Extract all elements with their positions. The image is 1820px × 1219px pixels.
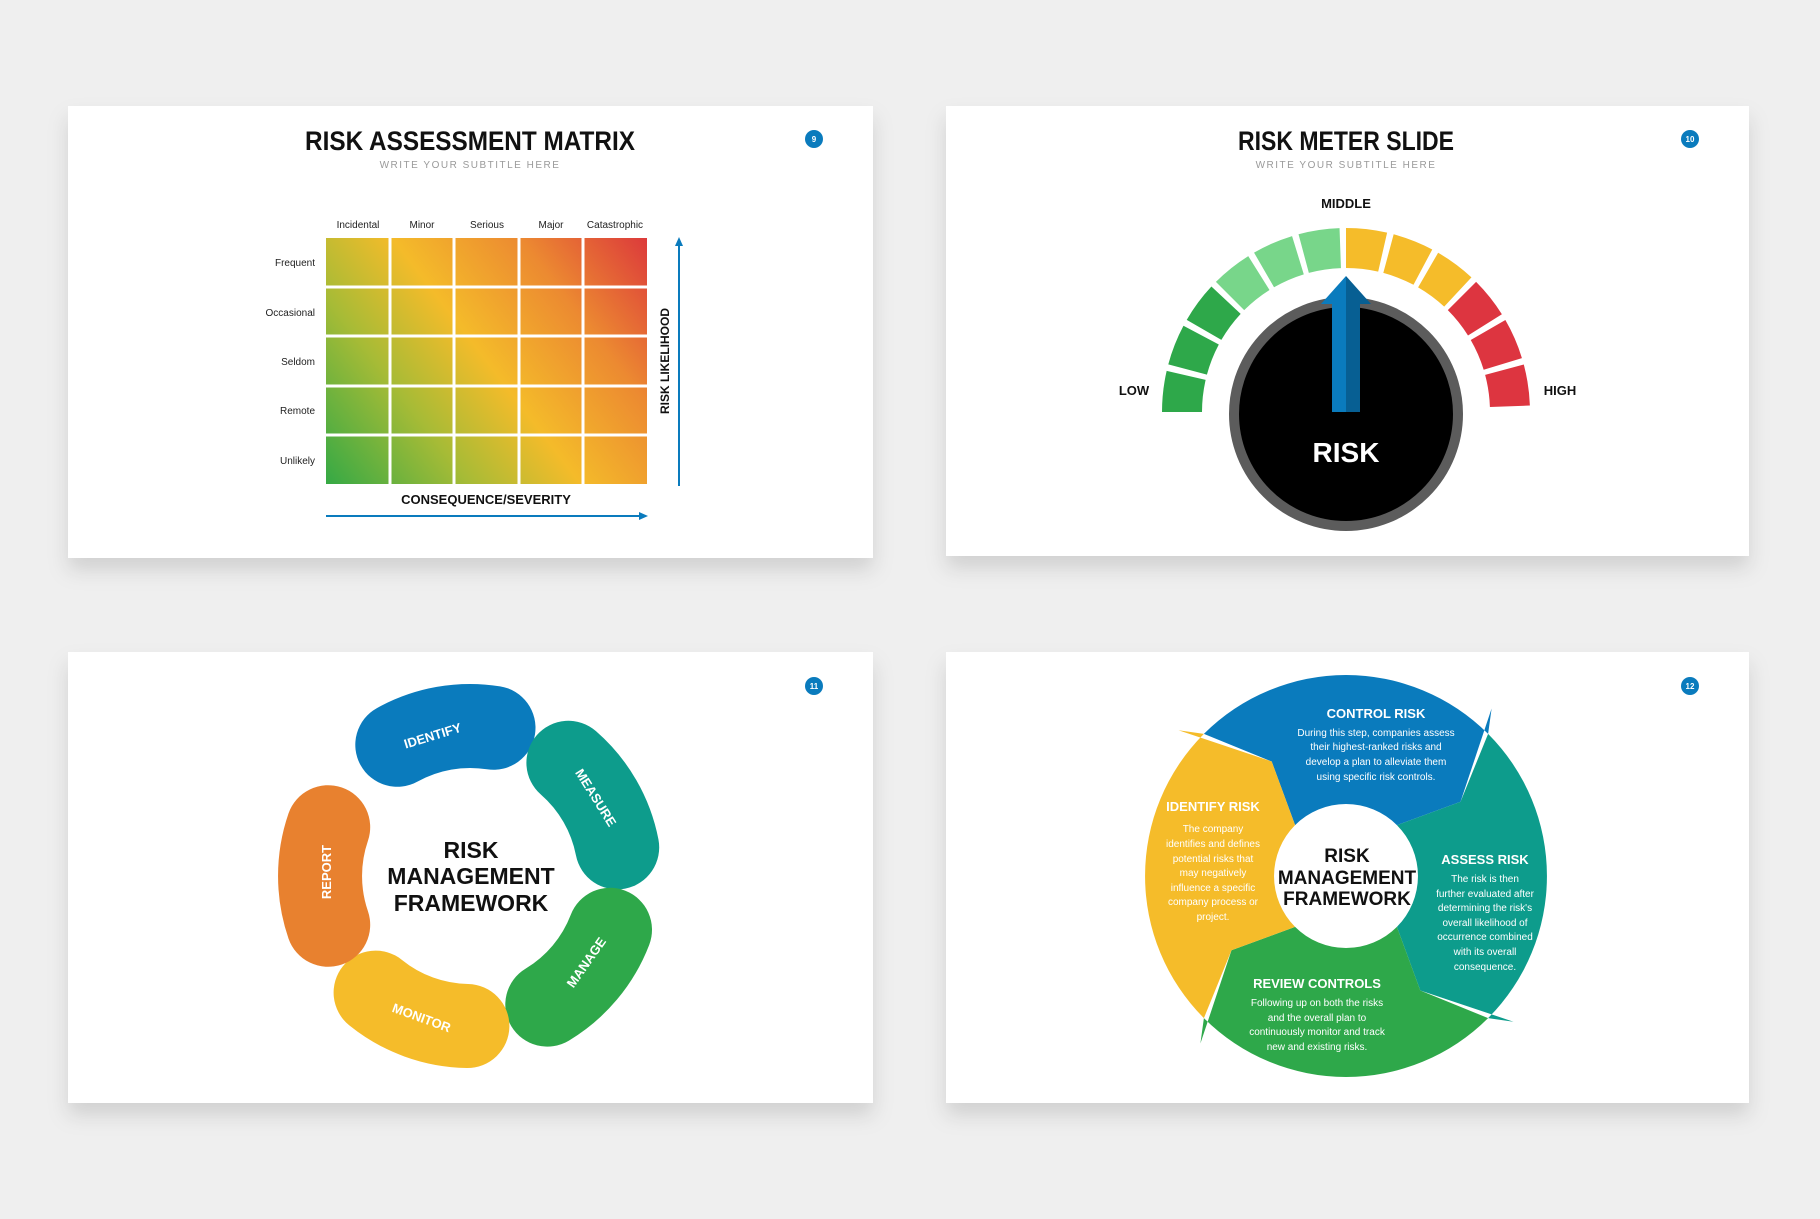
column labels: Minor	[409, 220, 435, 231]
matrix grid	[326, 238, 647, 484]
dial: RISK	[1313, 437, 1379, 468]
text: assess risk: ASSESS RISK	[1441, 852, 1529, 867]
segment labels	[319, 720, 620, 1035]
subtitle: WRITE YOUR SUBTITLE HERE	[1256, 160, 1436, 171]
meter arc segments	[1114, 180, 1578, 644]
page badge: 10	[1686, 135, 1695, 144]
center title: FRAMEWORK	[1283, 889, 1411, 910]
text: control risk: During this step, companies assess	[1297, 728, 1455, 739]
text: assess risk: with its overall	[1453, 947, 1516, 958]
title: RISK METER SLIDE	[1238, 126, 1454, 156]
center title: FRAMEWORK	[394, 890, 549, 916]
center title: RISK	[444, 837, 499, 863]
panel: risk assessment matrix	[68, 106, 873, 558]
segment labels: REPORT	[319, 845, 334, 899]
page badge	[805, 677, 823, 695]
text: review controls: Following up on both the risks	[1251, 998, 1383, 1009]
row labels: Frequent	[275, 258, 315, 269]
text: identify risk: project.	[1197, 912, 1229, 923]
text: assess risk	[1436, 852, 1535, 973]
column labels: Incidental	[337, 220, 379, 231]
labels	[1119, 196, 1576, 398]
page badge: 11	[810, 682, 819, 691]
row labels: Seldom	[281, 357, 315, 368]
arrow ring	[1145, 675, 1547, 1077]
segment labels: IDENTIFY	[402, 720, 464, 752]
row labels: Unlikely	[280, 456, 315, 467]
axis label: consequence: CONSEQUENCE/SEVERITY	[401, 492, 571, 507]
text: identify risk: potential risks that	[1173, 854, 1254, 865]
segment labels: MONITOR	[390, 1000, 453, 1035]
labels: LOW	[1119, 383, 1150, 398]
page badge	[805, 130, 823, 148]
needle arrow	[1321, 276, 1371, 412]
cycle segments	[320, 726, 617, 1026]
page badge	[1681, 130, 1699, 148]
center title	[387, 837, 555, 916]
text: identify risk: influence a specific	[1171, 883, 1255, 894]
axis label: risk likelihood: RISK LIKELIHOOD	[658, 308, 672, 414]
text: identify risk: identifies and defines	[1166, 839, 1260, 850]
text: assess risk: further evaluated after	[1436, 889, 1535, 900]
text: review controls: REVIEW CONTROLS	[1253, 976, 1381, 991]
center title: MANAGEMENT	[1278, 868, 1417, 889]
text: assess risk: The risk is then	[1451, 874, 1519, 885]
text: control risk: their highest-ranked risks and	[1310, 742, 1442, 753]
row labels	[266, 258, 315, 467]
column labels: Serious	[470, 220, 504, 231]
column labels: Major	[538, 220, 564, 231]
text: identify risk: may negatively	[1180, 868, 1246, 879]
page badge: 9	[812, 135, 817, 144]
arrow: risk likelihood	[675, 237, 683, 486]
text: control risk: develop a plan to alleviate them	[1306, 757, 1446, 768]
page badge	[1681, 677, 1699, 695]
subtitle: WRITE YOUR SUBTITLE HERE	[380, 160, 560, 171]
segment labels: MANAGE	[564, 934, 609, 990]
text: review controls: new and existing risks.	[1267, 1042, 1367, 1053]
panel: risk meter	[946, 106, 1749, 644]
text: review controls	[1249, 976, 1386, 1053]
center title: MANAGEMENT	[387, 863, 555, 889]
text: assess risk: determining the risk's	[1438, 903, 1532, 914]
center title: RISK	[1324, 846, 1370, 867]
text: identify risk: The company	[1183, 824, 1243, 835]
text: review controls: continuously monitor and track	[1249, 1027, 1386, 1038]
panel: risk management framework cycle	[68, 652, 873, 1103]
text: control risk	[1297, 706, 1455, 783]
text: assess risk: overall likelihood of	[1442, 918, 1528, 929]
page badge: 12	[1686, 682, 1695, 691]
dial	[1234, 302, 1458, 526]
column labels: Catastrophic	[587, 220, 643, 231]
text: identify risk	[1166, 799, 1260, 923]
row labels: Occasional	[266, 308, 315, 319]
text: assess risk: consequence.	[1454, 962, 1516, 973]
text: identify risk: company process or	[1168, 897, 1259, 908]
labels: HIGH	[1544, 383, 1576, 398]
segment labels: MEASURE	[572, 766, 620, 829]
panel: risk management framework arrows	[946, 652, 1749, 1103]
center title	[1278, 846, 1417, 910]
labels: MIDDLE	[1321, 196, 1371, 211]
text: control risk: using specific risk controls.	[1317, 772, 1435, 783]
text: assess risk: occurrence combined	[1437, 932, 1533, 943]
text: identify risk: IDENTIFY RISK	[1166, 799, 1260, 814]
row labels: Remote	[280, 406, 315, 417]
title: RISK ASSESSMENT MATRIX	[305, 126, 635, 156]
text: control risk: CONTROL RISK	[1327, 706, 1426, 721]
text: review controls: and the overall plan to	[1268, 1013, 1367, 1024]
column labels	[337, 220, 643, 231]
arrow: consequence	[326, 512, 648, 520]
